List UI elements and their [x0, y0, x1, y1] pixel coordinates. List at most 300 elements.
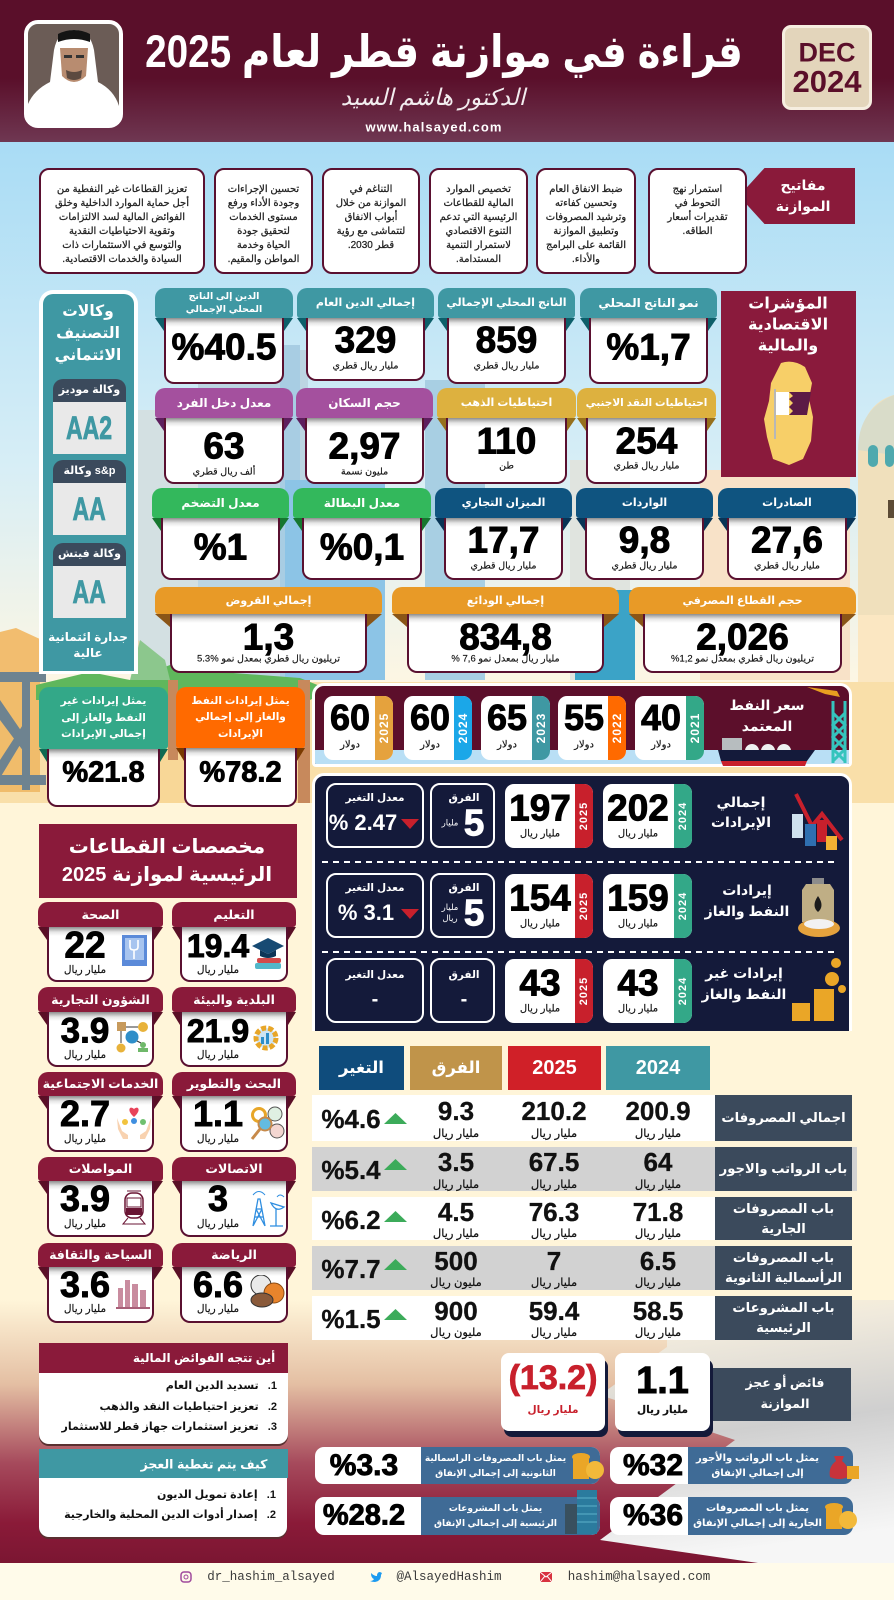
card: exports: الصادرات [762, 497, 812, 509]
surplus heading [39, 1343, 288, 1373]
expense row: secondary capital expenses: %7.7 [321, 1254, 381, 1284]
key 5 [214, 168, 313, 274]
expense row: secondary capital expenses: 6.5 [640, 1246, 676, 1276]
share: major projects: الرئيسية إلى إجمالي الإنفاق [434, 1518, 557, 1528]
sector: municipality and environment [172, 987, 296, 1067]
sector: transport [38, 1157, 163, 1237]
expense row: total: 9.3 [438, 1096, 474, 1126]
key 6: السيادة والخدمات الاقتصادية. [62, 254, 182, 265]
sector: sports: مليار ريال [197, 1303, 239, 1315]
key 3: لاستمرار التنمية [446, 240, 511, 251]
card 2025: 2025 [578, 802, 590, 830]
card: GDP growth: %1,7 [606, 326, 691, 368]
rate of change: - [372, 988, 378, 1010]
expense row: major projects: مليون ريال [430, 1327, 482, 1339]
table header: 2024: 2024 [636, 1057, 680, 1079]
oil price 2022: دولار [574, 740, 594, 750]
card: trade balance [435, 488, 572, 580]
sector: social services: 2.7 [60, 1093, 110, 1134]
card 2024: 202 [607, 788, 669, 828]
key 6: أجل حماية الموارد الداخلية وخلق [55, 198, 189, 209]
sector: commerce: مليار ريال [64, 1049, 106, 1061]
expense row: current expenses: 71.8 [633, 1197, 683, 1227]
card: per capita income: معدل دخل الفرد [177, 396, 271, 410]
expense row: secondary capital expenses: باب المصروفات [733, 1250, 834, 1265]
card: FX reserves: احتياطيات النقد الاجنبي [586, 397, 707, 409]
table header: 2025 [508, 1046, 601, 1090]
card: public debt: مليار ريال قطري [333, 360, 398, 372]
expense row: total: مليار ريال [635, 1128, 681, 1140]
card: debt to GDP: المحلي الإجمالي [186, 304, 262, 315]
email: hashim@halsayed.com [568, 1570, 710, 1584]
expense row: total: %4.6 [321, 1104, 381, 1134]
icon: map of Qatar with flag [764, 362, 813, 465]
sector: municipality and environment: 21.9 [187, 1013, 249, 1049]
deficit list [64, 1489, 276, 1521]
expense row: major projects: الرئيسية [756, 1320, 811, 1335]
key 3: المالية للقطاعات [444, 198, 513, 209]
keys heading arrow: الموازنة [776, 198, 830, 214]
expense row: current expenses: باب المصروفات [733, 1200, 834, 1216]
card 2025: 43 [519, 962, 561, 1004]
difference: الفرق [448, 792, 480, 804]
card: total loans: إجمالي القروض [226, 594, 311, 606]
card 2024: مليار ريال [618, 1004, 658, 1014]
sector: transport: المواصلات [69, 1162, 132, 1176]
panel: economic and financial indicators [721, 291, 856, 477]
date badge [782, 25, 872, 110]
card: GDP: مليار ريال قطري [474, 360, 539, 372]
expense row: total: 200.9 [625, 1096, 691, 1126]
card: trade balance: الميزان التجاري [462, 497, 545, 509]
oil price 2023: 65 [487, 697, 527, 738]
sector: social services: الخدمات الاجتماعية [43, 1077, 158, 1091]
expense row: salaries [312, 1147, 857, 1191]
title: قراءة في موازنة قطر لعام 2025 [145, 26, 743, 77]
difference: الفرق [448, 882, 480, 894]
icon: city skyline [116, 1280, 150, 1309]
difference: مليار [442, 902, 458, 912]
deficit heading [39, 1449, 288, 1478]
sector: education: مليار ريال [197, 964, 239, 976]
oil price 2023: دولار [497, 740, 517, 750]
oil price 2024: 2024 [456, 713, 470, 743]
sector: tourism and culture: السياحة والثقافة [49, 1248, 152, 1262]
deficit value: (13.2) [509, 1359, 597, 1397]
surplus heading: أين تتجه الفوائض المالية [133, 1351, 275, 1365]
row label: النفط والغاز [705, 903, 789, 919]
key 4: لتتماشى مع رؤية [337, 226, 405, 237]
deficit list: 2. إصدار أدوات الدين المحلية والخارجية [64, 1509, 276, 1521]
card: banking sector size: تريليون ريال قطري بمعدل نمو 1,2% [671, 654, 814, 664]
card: inflation: معدل التضخم [181, 496, 260, 510]
card 2024 [603, 874, 692, 938]
expense row: current expenses: الجارية [761, 1220, 806, 1236]
sector: health [38, 902, 163, 982]
rating: Fitch [53, 543, 126, 618]
share: current expenses: %36 [623, 1499, 683, 1532]
row label: الإيرادات [711, 814, 771, 830]
rate of change [326, 783, 424, 848]
sector: transport: 3.9 [60, 1178, 110, 1219]
instagram handle: dr_hashim_alsayed [207, 1570, 335, 1584]
website: www.halsayed.com [365, 120, 503, 134]
share: current expenses [610, 1497, 853, 1535]
rate of change: % 3.1 [338, 900, 394, 925]
rating: Moody's: وكالة موديز [59, 384, 120, 396]
key 5: الحياة وخدمة [237, 240, 290, 251]
oil price 2022 [558, 696, 626, 760]
share: current expenses: يمثل باب المصروفات [706, 1503, 809, 1514]
key 1 [648, 168, 747, 274]
panel: where surpluses go [39, 1343, 288, 1444]
key 2: والأداء. [572, 254, 600, 265]
surplus list: 2. تعزيز احتياطيات النقد والذهب [99, 1400, 277, 1412]
deficit list: 1. إعادة تمويل الديون [157, 1489, 276, 1501]
key 5: المواطن والمقيم. [228, 254, 299, 265]
expense row: salaries: باب الرواتب والاجور [720, 1161, 847, 1176]
card 2024: 2024 [677, 977, 689, 1005]
rating: S&P: وكالة s&p [63, 465, 116, 477]
icon: instagram [180, 1571, 192, 1583]
oil price 2023 [481, 696, 550, 760]
date badge: 2024 [793, 64, 861, 99]
expense row: current expenses [312, 1197, 852, 1240]
deficit heading: كيف يتم تغطية العجز [141, 1458, 267, 1472]
sector: municipality and environment: مليار ريال [197, 1049, 239, 1061]
icon: coin stacks [792, 958, 846, 1021]
card: population: حجم السكان [328, 396, 401, 410]
keys heading arrow: مفاتيح [780, 177, 826, 193]
card 2024: 43 [617, 962, 659, 1004]
icon: gear with chart [254, 1026, 278, 1050]
card: exports: 27,6 [751, 520, 823, 560]
card 2025 [505, 959, 593, 1023]
rating verdict [48, 630, 128, 660]
key 2: وترشيد المصروفات [546, 212, 626, 223]
key 1: استمرار نهج [673, 184, 722, 195]
row label: النفط والغاز [702, 986, 786, 1002]
rating: Fitch: AA [73, 574, 106, 610]
key 3: الرئيسية التي تدعم [440, 212, 517, 223]
keys heading arrow [739, 168, 855, 224]
card: GDP: الناتج المحلي الإجمالي [446, 297, 567, 309]
table header: difference: الفرق [432, 1059, 480, 1077]
card: total deposits: 834,8 [459, 616, 552, 658]
card: debt to GDP: الدين إلى الناتج [189, 291, 259, 302]
icon: mail [540, 1572, 552, 1582]
rating: S&P: AA [73, 491, 106, 527]
key 1: تقديرات أسعار [667, 212, 728, 223]
expense row: salaries: 3.5 [438, 1147, 474, 1177]
card: non-oil share of revenue: %21.8 [62, 756, 145, 788]
icon: money bag [830, 1456, 859, 1479]
difference [430, 783, 495, 848]
expense row: secondary capital expenses: الرأسمالية الثانوية [725, 1270, 842, 1285]
share: major projects: %28.2 [323, 1500, 405, 1532]
deficit value [501, 1353, 605, 1431]
sector: social services: مليار ريال [64, 1133, 106, 1145]
card: gold reserves: احتياطيات الذهب [461, 397, 552, 409]
surplus list: 3. تعزيز استثمارات جهاز قطر للاستثمار [62, 1421, 277, 1433]
share: salaries: إلى إجمالي الإنفاق [711, 1468, 804, 1478]
expense row: current expenses: %6.2 [321, 1205, 381, 1235]
expense row: major projects: 58.5 [633, 1296, 683, 1326]
card 2024 [603, 959, 692, 1023]
card: total loans [155, 587, 382, 673]
key 3: التنوع الاقتصادي [445, 226, 512, 237]
key 5: لتحقيق جودة [237, 226, 290, 237]
card 2024: مليار ريال [618, 828, 658, 840]
card: trade balance: 17,7 [467, 520, 540, 560]
deficit value: مليار ريال [527, 1404, 579, 1416]
footer [0, 1563, 894, 1600]
card 2025: 154 [509, 878, 571, 918]
rating agencies heading: الائتماني [55, 347, 121, 364]
surplus list [61, 1380, 277, 1433]
key 4 [322, 168, 420, 274]
oil price heading [729, 697, 805, 734]
difference: 5 [464, 802, 484, 844]
sector: social services [38, 1072, 163, 1152]
difference: الفرق [448, 969, 480, 981]
expense row: secondary capital expenses: مليار ريال [531, 1277, 577, 1289]
rating: Moody's [53, 379, 126, 454]
card: unemployment: %0,1 [320, 526, 404, 568]
key 5: وجودة الأداء ورفع [228, 198, 299, 209]
header band [0, 0, 894, 142]
key 4: قطر 2030. [348, 240, 394, 251]
icon: chart with arrow [792, 793, 844, 850]
card 2025 [505, 874, 593, 938]
icon: graduation cap [252, 938, 284, 969]
sector: sports: الرياضة [211, 1248, 257, 1262]
expense row: total: مليار ريال [531, 1128, 577, 1140]
budget surplus or deficit label: فائض أو عجز [746, 1376, 824, 1390]
expense row: salaries: مليار ريال [433, 1179, 479, 1191]
rating: Moody's: AA2 [66, 410, 113, 446]
rating agencies heading [55, 303, 121, 364]
row label: إيرادات [722, 882, 772, 898]
table header: change: التغير [339, 1059, 384, 1077]
sector: commerce: الشؤون التجارية [51, 992, 150, 1006]
expense row: major projects: 59.4 [529, 1296, 579, 1326]
expense row: secondary capital expenses: 7 [547, 1246, 561, 1276]
card: inflation [152, 488, 289, 580]
sector: transport: مليار ريال [64, 1218, 106, 1230]
card 2024: 159 [607, 878, 669, 918]
expense row: total: 210.2 [521, 1096, 587, 1126]
card: exports: مليار ريال قطري [754, 560, 820, 572]
sector: tourism and culture: 3.6 [60, 1264, 110, 1305]
key 3: المستدامة. [456, 254, 501, 265]
icon: caring hands [117, 1108, 151, 1139]
card: total deposits [392, 587, 619, 673]
oil price 2024 [404, 696, 472, 760]
card: population: مليون نسمة [341, 466, 388, 478]
rating verdict: عالية [73, 646, 103, 660]
sector: education: 19.4 [187, 928, 249, 964]
indicators heading: المؤشرات [748, 296, 828, 312]
oil price 2021: 40 [641, 697, 681, 738]
card: banking sector size: 2,026 [696, 616, 789, 658]
card: non-oil share of revenue: يمثل إيرادات غير [61, 695, 146, 707]
card 2025: مليار ريال [520, 828, 560, 840]
sector: telecommunications [172, 1157, 296, 1237]
icon: sports balls [250, 1275, 284, 1308]
key 6: والتوسع في الاستثمارات ذات [62, 240, 182, 251]
key 3 [429, 168, 528, 274]
expense row: secondary capital expenses: مليون ريال [430, 1277, 482, 1289]
surplus value: مليار ريال [637, 1404, 688, 1416]
row label [711, 794, 771, 830]
portrait of Dr. Hashim Alsayed [24, 20, 123, 128]
share: salaries [610, 1447, 853, 1484]
sector: telecommunications: 3 [208, 1178, 228, 1219]
expense row: major projects: مليار ريال [635, 1327, 681, 1339]
card: GDP [438, 288, 575, 384]
sector: research and development: البحث والتطوير [187, 1077, 281, 1091]
expense row: secondary capital expenses: 500 [434, 1246, 478, 1276]
key 6: تعزيز القطاعات غير النفطية من [57, 184, 187, 195]
row label [704, 882, 789, 920]
indicators heading: الاقتصادية [748, 316, 828, 334]
card: population [296, 388, 433, 484]
card: non-oil share of revenue: النفط والغاز إلى [61, 712, 146, 724]
sector: research and development [172, 1072, 296, 1152]
expense row: current expenses: مليار ريال [433, 1228, 479, 1240]
difference: ريال [442, 913, 458, 923]
key 2 [536, 168, 636, 274]
oil price 2023: 2023 [534, 713, 548, 743]
indicators heading: والمالية [758, 338, 818, 354]
oil price 2025: دولار [340, 740, 360, 750]
key 1: التحوط في [675, 198, 720, 209]
key 4: أبواب الانفاق [345, 212, 397, 223]
key 5: تحسين الإجراءات [228, 184, 299, 195]
sector: telecommunications: الاتصالات [205, 1162, 263, 1176]
budget surplus or deficit label: الموازنة [761, 1397, 809, 1411]
card: gold reserves: طن [499, 460, 514, 472]
sector: commerce: 3.9 [61, 1012, 109, 1050]
share: secondary capital: %3.3 [330, 1449, 398, 1482]
card: population: 2,97 [328, 426, 401, 466]
surplus value [615, 1353, 710, 1431]
card: banking sector size: حجم القطاع المصرفي [682, 594, 803, 606]
oil price 2025: 2025 [377, 713, 391, 743]
card 2024: مليار ريال [618, 918, 658, 930]
panel: budget revenues [312, 773, 852, 1031]
oil price 2021: دولار [651, 740, 671, 750]
sector: education [172, 902, 296, 982]
oil price 2025: 60 [330, 697, 370, 738]
date badge: DEC [798, 38, 856, 68]
card: banking sector size [629, 587, 856, 673]
expense row: major projects: 900 [434, 1296, 478, 1326]
oil price heading: المعتمد [742, 718, 792, 734]
icon: stethoscope tablet [122, 935, 147, 966]
rate of change [326, 958, 424, 1023]
surplus list: 1. تسديد الدين العام [166, 1380, 277, 1392]
card: unemployment: معدل البطالة [324, 496, 400, 510]
card: FX reserves: 254 [616, 420, 677, 462]
card: total loans: 1,3 [243, 616, 294, 658]
icon: antenna and dish [252, 1191, 286, 1227]
sector: health: 22 [64, 924, 106, 966]
rating agencies heading: وكالات [62, 303, 114, 320]
surplus value: 1.1 [636, 1360, 689, 1402]
card: oil share of revenue: والغاز إلى إجمالي [195, 711, 286, 723]
expense row: major projects: %1.5 [321, 1304, 381, 1334]
expense row: total [312, 1095, 852, 1141]
panel: credit rating agencies [39, 290, 138, 674]
sector: sports [172, 1243, 296, 1323]
icon: tram [122, 1190, 146, 1224]
budget surplus or deficit label [705, 1368, 851, 1421]
key 6: الفوائض المالية لسد الالتزامات [59, 212, 185, 223]
card 2025 [505, 784, 593, 848]
key 2: ضبط الانفاق العام [549, 184, 623, 195]
key 1: الطاقه. [682, 226, 712, 237]
card 2025: مليار ريال [520, 1004, 560, 1014]
expense row: current expenses: مليار ريال [531, 1228, 577, 1240]
sector: telecommunications: مليار ريال [197, 1218, 239, 1230]
expense row: total: اجمالي المصروفات [721, 1110, 846, 1125]
sector: tourism and culture: مليار ريال [64, 1303, 106, 1315]
oil price 2024: 60 [410, 697, 450, 738]
icon: twitter [370, 1572, 382, 1582]
key 2: وتحسين كفاءته [555, 198, 617, 209]
share: secondary capital [315, 1447, 600, 1484]
indicators heading [748, 296, 828, 354]
card: public debt [297, 288, 434, 381]
sectors heading [39, 824, 297, 898]
expense row: salaries: مليار ريال [635, 1179, 681, 1191]
difference: 5 [464, 892, 484, 934]
oil price 2021 [635, 696, 704, 760]
row label: إيرادات غير [705, 965, 783, 981]
share: salaries: %32 [623, 1449, 683, 1482]
icon: office tower [565, 1490, 597, 1534]
sector: research and development: 1.1 [193, 1093, 243, 1134]
card 2024: 2024 [677, 892, 689, 920]
difference: - [461, 988, 467, 1010]
card 2025: 2025 [578, 977, 590, 1005]
expense row: salaries: 64 [644, 1147, 672, 1177]
rating agencies heading: التصنيف [56, 325, 120, 342]
table header: 2024 [606, 1046, 710, 1090]
key 2: وتطبيق الموازنة [553, 226, 619, 237]
difference [430, 873, 495, 938]
panel: adopted oil price [312, 683, 852, 767]
card: unemployment [293, 488, 431, 580]
card 2024: 2024 [677, 802, 689, 830]
card: imports: مليار ريال قطري [612, 560, 677, 572]
card: debt to GDP: %40.5 [172, 326, 276, 368]
card: GDP: 859 [476, 320, 537, 360]
expense row: current expenses: 4.5 [438, 1197, 474, 1227]
oil price 2021: 2021 [688, 713, 702, 743]
card: total deposits: إجمالي الودائع [467, 594, 544, 606]
sector: tourism and culture [38, 1243, 163, 1323]
panel: covering the deficit [39, 1449, 287, 1537]
card: public debt: إجمالي الدين العام [316, 297, 415, 309]
share: salaries: يمثل باب الرواتب والأجور [696, 1452, 819, 1464]
key 5: مستوى الخدمات [229, 212, 298, 223]
difference [430, 958, 495, 1023]
key 2: القائمة على البرامج [546, 240, 626, 251]
card: total deposits: مليار ريال بمعدل نمو 7,6 % [451, 654, 560, 664]
